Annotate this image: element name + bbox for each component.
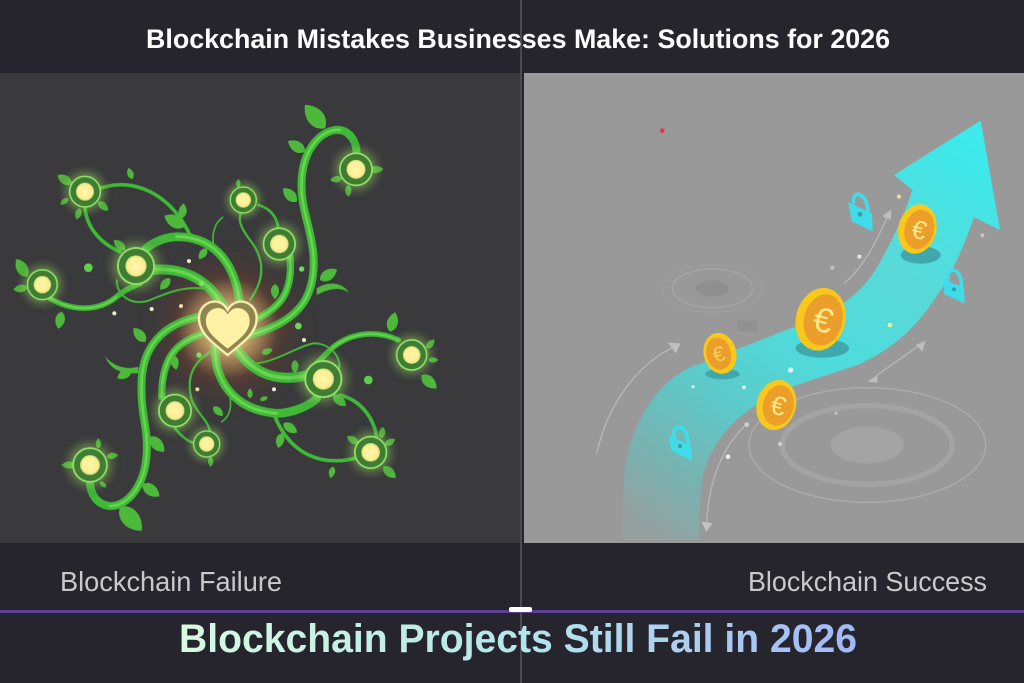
icon: padlock right: [943, 270, 965, 303]
icon: euro coin centre: [789, 283, 852, 358]
icon: padlock top: [848, 194, 873, 231]
icon: euro coin bottom: €: [767, 389, 789, 422]
icon: euro coin top: €: [909, 214, 930, 246]
icon: euro coin left: €: [710, 341, 728, 367]
bottom headline: Blockchain Projects Still Fail in 2026: [179, 617, 857, 661]
purple separator with tab: [0, 607, 1024, 613]
title: Blockchain Mistakes Businesses Make: Solutions for 2026: [146, 24, 890, 54]
icon: euro coin centre: €: [809, 300, 837, 342]
vertical divider: [520, 0, 522, 683]
icon: euro coin left: [699, 329, 741, 379]
panel: blockchain failure: [0, 73, 520, 543]
icon: euro coin bottom: [751, 376, 802, 434]
label: blockchain failure: Blockchain Failure: [60, 566, 282, 597]
icon: padlock bottom left: [669, 427, 692, 461]
label: blockchain success: Blockchain Success: [748, 566, 987, 597]
icon: euro coin top: [893, 200, 942, 264]
panel: blockchain success: [524, 73, 1024, 543]
illustration: rising arrow with coins: [597, 121, 1000, 540]
illustration: glowing vines and heart: [12, 100, 440, 537]
